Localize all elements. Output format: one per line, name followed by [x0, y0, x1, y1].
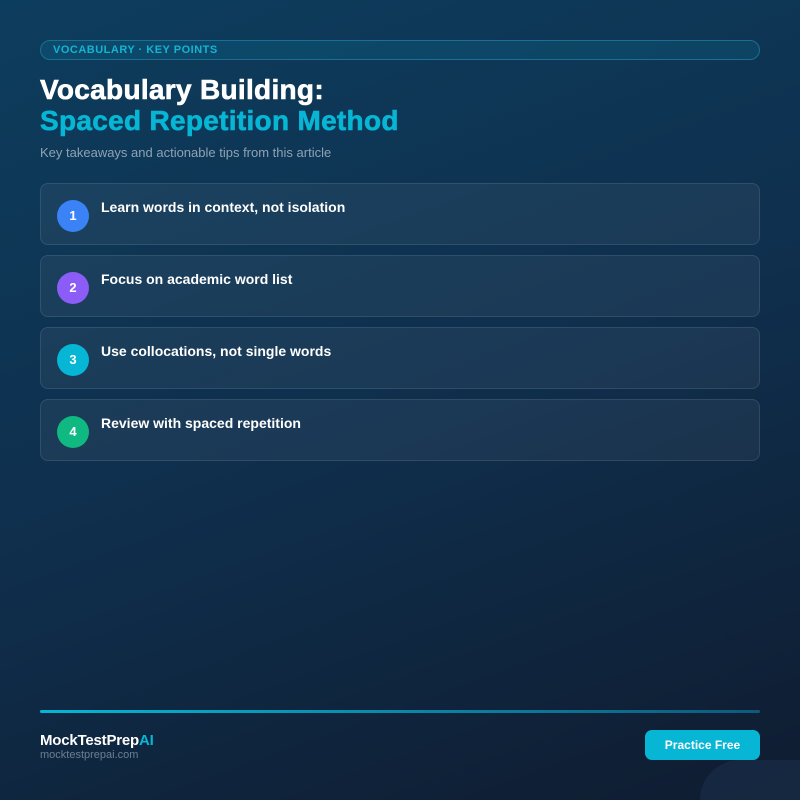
brand: mocktestprepai.com	[40, 749, 138, 761]
card 1: 1	[69, 208, 77, 223]
title line 1: Vocabulary Building:	[40, 74, 324, 105]
card 2: 2	[69, 280, 77, 295]
title line 2: Spaced Repetition Method	[40, 105, 399, 136]
button: Practice Free	[665, 738, 740, 752]
card 3: 3	[69, 352, 77, 367]
card 3: Use collocations, not single words	[101, 343, 331, 359]
button	[645, 730, 760, 760]
category pill: VOCABULARY · KEY POINTS	[53, 44, 218, 56]
card 4: Review with spaced repetition	[101, 415, 301, 431]
card 1: Learn words in context, not isolation	[101, 199, 345, 215]
card 2	[40, 255, 760, 317]
card 2: Focus on academic word list	[101, 271, 292, 287]
card 4: 4	[69, 424, 77, 439]
category pill	[40, 40, 760, 60]
card 1	[40, 183, 760, 245]
card 4	[40, 399, 760, 461]
brand: MockTestPrepAI	[40, 732, 154, 749]
card 3	[40, 327, 760, 389]
decorative corner	[700, 760, 800, 800]
subtitle: Key takeaways and actionable tips from this article	[40, 145, 331, 160]
brand	[40, 732, 154, 761]
